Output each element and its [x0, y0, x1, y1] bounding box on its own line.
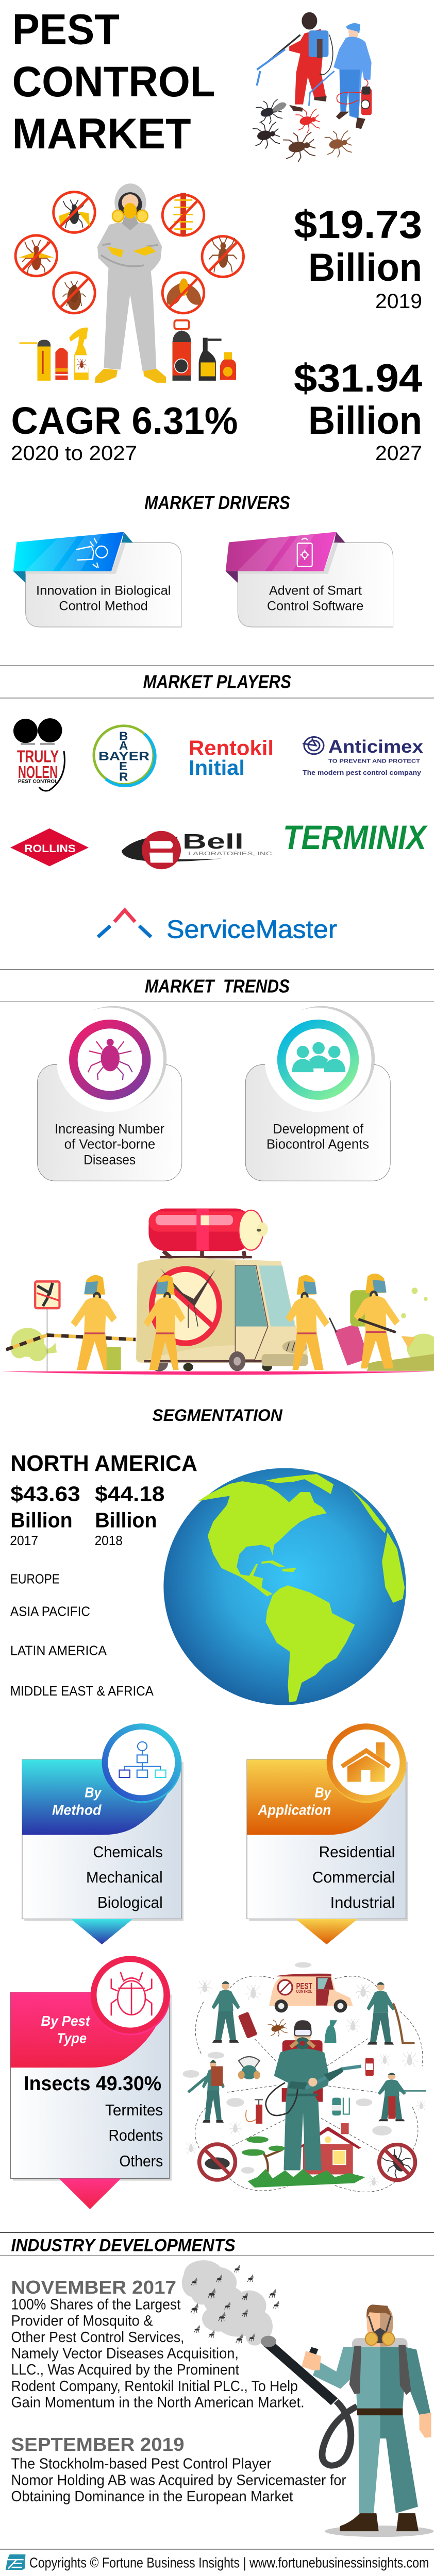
green gas clouds	[11, 1287, 434, 1371]
development: November 2017: Other Pest Control Services,	[11, 2329, 185, 2346]
title: PEST	[12, 5, 120, 53]
logo: Truly Nolen	[13, 718, 64, 791]
heading: industry developments: INDUSTRY DEVELOPMENTS	[11, 2236, 235, 2256]
illustration: hazmat worker with prohibited pests and sprays	[15, 183, 244, 383]
logo: Bell Laboratories: LABORATORIES, INC.	[188, 851, 274, 857]
icon: house	[342, 1742, 390, 1782]
panel: by method: Chemicals	[93, 1843, 163, 1861]
regional stats: North America: 2017	[10, 1534, 38, 1548]
prohibited mosquito	[15, 235, 57, 276]
red suit worker with sprayer	[257, 12, 335, 112]
logo: Bayer: E	[119, 759, 127, 773]
pest control van: CONTROL	[296, 1989, 312, 1994]
development: September 2019: Obtaining Dominance in the European Market	[11, 2488, 293, 2505]
panel: driver innovation in biological control	[13, 532, 181, 627]
panel: by application: By	[315, 1785, 332, 1801]
Caribbean	[261, 1561, 296, 1572]
development: November 2017: NOVEMBER 2017	[11, 2277, 176, 2298]
prohibited ant	[202, 236, 244, 277]
panel: by pest type	[10, 1956, 172, 2209]
panel: by pest type: Others	[119, 2152, 163, 2170]
icon: hierarchy	[119, 1742, 166, 1777]
title: MARKET	[12, 110, 191, 158]
logo: Rollins	[10, 828, 89, 866]
house	[299, 2123, 361, 2174]
panel: trend vector-borne diseases: Increasing Number	[55, 1122, 164, 1137]
roof gas canister	[148, 1209, 268, 1258]
stat: 2019 market size: Billion	[308, 246, 422, 290]
prohibited fly	[54, 192, 95, 232]
logo: Bayer: BAYER	[98, 750, 149, 763]
development: November 2017: Namely Vector Diseases Acquisition,	[11, 2346, 239, 2362]
logo: Anticimex: TO PREVENT AND PROTECT	[328, 758, 420, 764]
development: September 2019: Nomor Holding AB was Acquired by Servicemaster for	[11, 2472, 346, 2488]
panel: by method: Method	[52, 1802, 102, 1818]
hazmat suit figure	[95, 183, 166, 383]
panel: by pest type: By Pest	[41, 2013, 91, 2029]
panel: by application: Commercial	[312, 1868, 395, 1886]
icon: beetle	[111, 1972, 152, 2015]
crew in yellow suits	[71, 1274, 415, 1370]
tree	[242, 2137, 285, 2174]
title	[12, 5, 215, 158]
icon: smart tablet	[297, 538, 312, 566]
heading: segmentation: SEGMENTATION	[152, 1405, 283, 1425]
region list: ASIA PACIFIC	[10, 1604, 90, 1619]
prohibited cockroach	[379, 2144, 416, 2181]
panel: driver smart control software: Advent of Smart	[269, 584, 362, 598]
logo: Anticimex	[303, 736, 423, 776]
pink ground	[0, 1371, 434, 1375]
logo: Bayer: R	[119, 770, 128, 784]
region list	[10, 1572, 154, 1699]
small workers	[188, 1981, 426, 2123]
blue suit worker with bottle	[333, 23, 372, 129]
region list: MIDDLE EAST & AFRICA	[10, 1684, 154, 1699]
illustration: fogger worker and mosquito cloud	[182, 2260, 433, 2537]
logo: Truly Nolen: TRULY	[17, 748, 59, 766]
grass	[248, 2169, 365, 2188]
spray cans and bottles	[20, 320, 236, 381]
stat: 2027 market size: Billion	[308, 399, 422, 443]
warning sign	[35, 1281, 59, 1371]
panel: by application	[247, 1723, 408, 1944]
development: November 2017	[11, 2277, 305, 2411]
icon: hand and microbe	[76, 538, 107, 568]
globe	[163, 1468, 406, 1705]
logo: Rentokil Initial: Rentokil	[189, 736, 274, 760]
stat: CAGR: 2020 to 2027	[11, 442, 137, 465]
panel: by pest type: Insects 49.30%	[24, 2072, 161, 2095]
regional stats: North America	[10, 1451, 197, 1548]
logo: Truly Nolen: NOLEN	[18, 763, 58, 782]
regional stats: North America: $44.18	[95, 1482, 165, 1506]
fog cloud	[182, 2260, 273, 2346]
mosquitoes	[191, 2265, 279, 2344]
regional stats: North America: NORTH AMERICA	[10, 1451, 197, 1476]
stat: CAGR: CAGR 6.31%	[11, 399, 238, 442]
development: September 2019: The Stockholm-based Pest Control Player	[11, 2456, 272, 2472]
panel: trend biocontrol agents	[245, 1006, 390, 1181]
prohibited cockroach	[54, 273, 95, 313]
heading: market players: MARKET PLAYERS	[143, 671, 291, 692]
development: November 2017: Gain Momentum in the North American Market.	[11, 2395, 305, 2411]
logo: Anticimex: Anticimex	[328, 736, 423, 757]
fogger gun and hose	[261, 2336, 357, 2466]
logo: Bell Laboratories: Bell	[182, 829, 244, 853]
panel: driver innovation in biological control: Innovation in Biological	[36, 584, 171, 598]
stat: 2027 market size	[294, 356, 422, 465]
panel: trend vector-borne diseases	[37, 1006, 182, 1181]
stat: 2019 market size: 2019	[375, 289, 422, 313]
panel: by method: By	[85, 1785, 102, 1801]
panel: by method: Mechanical	[86, 1868, 163, 1886]
logo: Rentokil Initial: Initial	[189, 755, 245, 779]
stat: 2027 market size: $31.94	[294, 356, 422, 400]
logo: Bell Laboratories	[122, 829, 274, 869]
worker figure	[302, 2304, 433, 2537]
illustration: fumigation van with hazmat crew	[0, 1209, 434, 1375]
prohibited rat	[199, 2144, 235, 2180]
panel: driver innovation in biological control: Control Method	[59, 600, 148, 613]
stat: 2019 market size: $19.73	[294, 202, 422, 247]
logo: Bayer: A	[119, 739, 128, 753]
development: November 2017: 100% Shares of the Largest	[11, 2297, 181, 2313]
title: CONTROL	[12, 58, 215, 106]
development: November 2017: LLC., Was Acquired by the Prominent	[11, 2362, 239, 2378]
stat: 2027 market size: 2027	[375, 442, 422, 465]
panel: by application: Application	[258, 1802, 331, 1818]
South America	[266, 1585, 355, 1702]
icon: group of people	[292, 1042, 345, 1072]
logo: Bayer: B	[119, 729, 128, 743]
van	[136, 1258, 308, 1371]
pest control van	[269, 1974, 353, 2012]
prohibited moth	[162, 273, 204, 313]
regional stats: North America: $43.63	[10, 1482, 80, 1506]
dashed connectors	[195, 1976, 423, 2192]
stat: CAGR	[11, 399, 238, 465]
development: September 2019: SEPTEMBER 2019	[11, 2434, 185, 2455]
panel: trend vector-borne diseases: Diseases	[84, 1153, 136, 1167]
icon: tick	[88, 1039, 132, 1080]
panel: driver smart control software	[226, 532, 393, 627]
panel: trend vector-borne diseases: of Vector-borne	[64, 1138, 155, 1151]
heading: market trends: MARKET TRENDS	[145, 976, 290, 996]
prohibited centipede	[162, 193, 204, 236]
regional stats: North America: Billion	[95, 1508, 157, 1532]
illustration: pest control services collage	[182, 1962, 426, 2192]
regional stats: North America: 2018	[95, 1534, 123, 1548]
logo: Bayer	[94, 726, 155, 786]
logo: Rentokil Initial	[189, 736, 274, 779]
regional stats: North America: Billion	[10, 1508, 73, 1532]
gray background pests	[182, 1962, 426, 2187]
panel: trend biocontrol agents: Development of	[273, 1122, 364, 1137]
region list: EUROPE	[10, 1572, 60, 1586]
pest control van: PEST	[296, 1981, 312, 1991]
stat: 2019 market size	[294, 202, 422, 313]
panel: by pest type: Rodents	[108, 2126, 163, 2144]
development: September 2019	[11, 2434, 346, 2505]
barrier	[6, 1335, 136, 1350]
panel: by method: Biological	[97, 1893, 163, 1911]
logo: Rollins: ROLLINS	[24, 842, 76, 855]
panel: by pest type: Termites	[105, 2101, 163, 2119]
logo: ServiceMaster: ServiceMaster	[166, 916, 337, 943]
development: November 2017: Provider of Mosquito &	[11, 2313, 153, 2329]
small supplies	[238, 2017, 374, 2124]
panel: by application: Industrial	[330, 1893, 395, 1911]
panel: by application: Residential	[319, 1843, 395, 1861]
logo: ServiceMaster	[98, 910, 337, 943]
development: November 2017: Rodent Company, Rentokil Initial PLC., To Help	[11, 2378, 298, 2395]
Africa and Europe edge	[349, 1487, 405, 1603]
icon: Fortune Business Insights logo	[6, 2554, 25, 2570]
North America	[198, 1481, 327, 1597]
illustration: two exterminators with insects	[252, 12, 372, 164]
insects group	[252, 97, 353, 164]
panel: driver smart control software: Control Software	[267, 600, 363, 613]
panel: trend biocontrol agents: Biocontrol Agents	[266, 1138, 369, 1151]
panel: by method	[22, 1723, 183, 1944]
logo: Anticimex: The modern pest control company	[303, 769, 422, 776]
main teal worker	[266, 2020, 361, 2170]
panel: by pest type: Type	[57, 2030, 87, 2046]
region list: LATIN AMERICA	[10, 1644, 107, 1658]
heading: market drivers: MARKET DRIVERS	[144, 493, 290, 513]
logo: Truly Nolen: PEST CONTROL	[18, 779, 58, 784]
